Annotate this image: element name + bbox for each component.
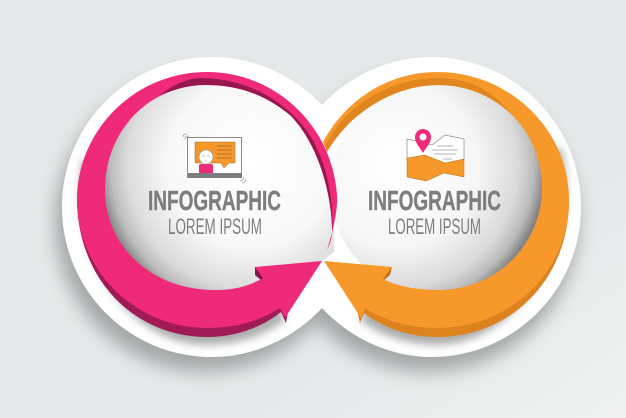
subheading left: LOREM IPSUM [168,214,262,239]
icon: presenter on screen [183,134,246,183]
infographic [42,57,590,384]
subheading right: LOREM IPSUM [388,214,481,239]
map lower fold [407,155,464,181]
panel: left disc [100,80,334,295]
map text lines [432,146,458,159]
pink barb edge [255,267,265,281]
orange inner band [325,78,512,152]
blob shadow [55,72,578,372]
heading left: INFOGRAPHIC [148,185,281,216]
map upper [407,135,464,164]
ring shadows on white base [80,140,566,345]
person head [199,150,213,164]
pink arrow body [77,72,337,328]
heading right: INFOGRAPHIC [368,185,501,216]
person body [199,164,213,173]
panel: right disc [330,80,546,296]
white infinity base [62,57,581,357]
speech bubble [195,142,235,168]
pin hole [420,134,426,140]
screen base bar [188,173,242,178]
arrow: pink [77,72,337,337]
person face [202,156,210,161]
pink inner band [159,78,332,235]
orange arrow body [323,72,569,328]
bubble lines [217,146,232,158]
orange arrow thickness [355,200,569,337]
pink arrow thickness [77,200,290,337]
pin [415,129,431,153]
icon: map with pin [407,129,464,181]
corner marks [183,134,246,183]
arrow: orange [323,72,569,337]
screen frame [188,138,242,178]
orange barb edge [381,267,392,281]
